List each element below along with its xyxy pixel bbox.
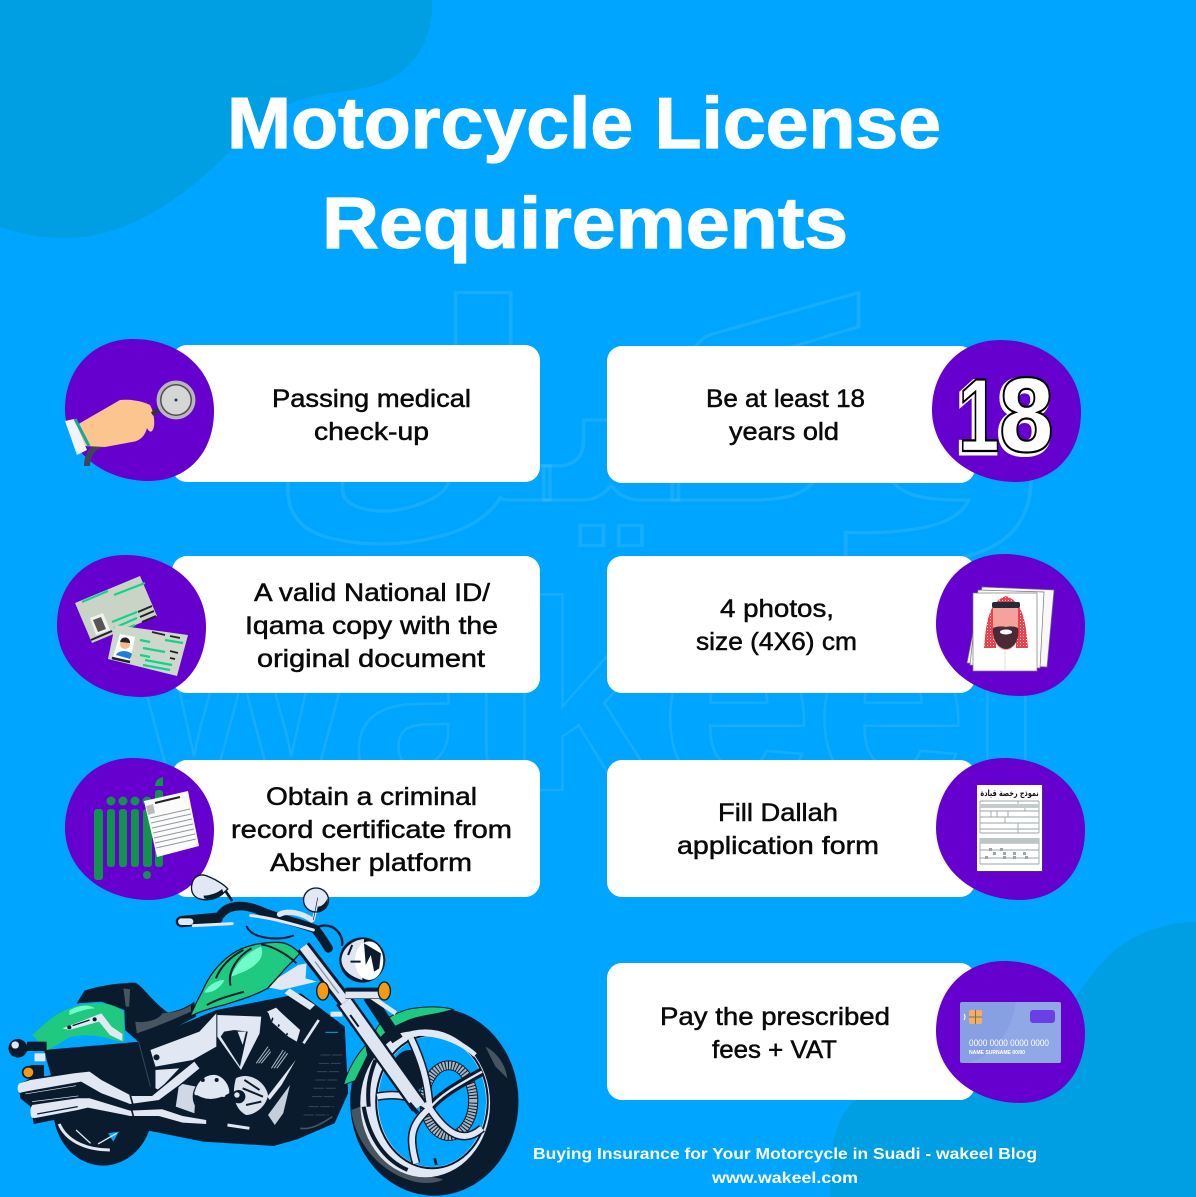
- engine silver parts rear: [139, 1013, 216, 1113]
- mirrors: [192, 875, 329, 920]
- icon: ID cards: [75, 576, 188, 676]
- handlebars: [182, 906, 342, 948]
- icon: form document: [977, 785, 1043, 872]
- rear wheel: [53, 1050, 153, 1166]
- text: Iqama copy with the: [245, 612, 498, 640]
- text: original document: [257, 645, 485, 673]
- text: [677, 799, 879, 860]
- purple blob: [936, 758, 1085, 900]
- icon: form document: نموذج رخصة قيادة: [980, 788, 1039, 798]
- icon: credit card: NAME SURNAME 00/00: [969, 1050, 1025, 1056]
- rear fender: [32, 1003, 124, 1050]
- panel: criminal record certificate: [65, 758, 540, 900]
- engine silver parts upper: [264, 963, 317, 1034]
- fuel tank: [190, 942, 300, 1017]
- text: A valid National ID/: [254, 579, 490, 607]
- footer text: www.wakeel.com: [711, 1170, 858, 1187]
- rear light and indicator: [8, 1039, 47, 1078]
- icon: hand with stethoscope: [65, 380, 196, 466]
- text: [272, 385, 471, 446]
- panel: fees: [607, 961, 1085, 1103]
- purple blob: [936, 554, 1085, 696]
- front fender: [343, 1007, 453, 1085]
- text: check-up: [314, 418, 429, 446]
- footer text: Buying Insurance for Your Motorcycle in Suadi - wakeel Blog: [533, 1146, 1037, 1163]
- icon: number 18: [956, 358, 1056, 477]
- purple blob: [57, 555, 206, 697]
- text: [231, 783, 512, 877]
- watermark: وكيل: [266, 246, 1054, 568]
- panel: age 18: [607, 340, 1081, 483]
- card: [607, 760, 975, 897]
- text: [706, 385, 865, 446]
- text: Passing medical: [272, 385, 471, 413]
- card: [172, 345, 540, 482]
- headlight: [339, 937, 385, 983]
- card: [607, 346, 975, 483]
- background shape: top left: [0, 0, 432, 238]
- icon: number 18: 1: [958, 358, 1000, 474]
- text: Be at least 18: [706, 385, 865, 413]
- title: Motorcycle License: [227, 84, 941, 164]
- purple blob: [932, 340, 1081, 482]
- purple blob: [65, 758, 214, 900]
- text: [245, 579, 498, 673]
- text: Obtain a criminal: [266, 783, 477, 811]
- front forks: [343, 997, 419, 1113]
- seat: [77, 983, 196, 1045]
- icon: credit card: [960, 1002, 1061, 1063]
- text: record certificate from: [231, 816, 512, 844]
- title: [227, 84, 941, 264]
- text: fees + VAT: [712, 1036, 837, 1064]
- icon: number 18: 1: [956, 360, 998, 476]
- panel: medical check-up: [65, 339, 540, 482]
- indicators: [317, 982, 390, 1000]
- text: application form: [677, 832, 879, 860]
- title: Requirements: [322, 184, 848, 264]
- card: [172, 556, 540, 693]
- card: [172, 760, 540, 897]
- text: Pay the prescribed: [660, 1003, 890, 1031]
- panel: national ID: [57, 555, 540, 697]
- card: [607, 963, 975, 1100]
- brake disc: [425, 1065, 473, 1136]
- purple blob: [65, 339, 214, 481]
- purple blob: [936, 961, 1085, 1103]
- exhaust pipes: [18, 1060, 210, 1128]
- watermark: [131, 246, 1054, 848]
- panel: photos: [607, 554, 1085, 696]
- text: years old: [729, 418, 839, 446]
- bike body and engine: [44, 963, 348, 1146]
- text: [696, 595, 857, 656]
- text: Absher platform: [270, 849, 472, 877]
- text: 4 photos,: [720, 595, 834, 623]
- card: [607, 556, 975, 693]
- footer text: [533, 1146, 1037, 1187]
- engine silver parts front: [193, 1010, 342, 1129]
- background shape: bottom right: [830, 922, 1196, 1197]
- icon: number 18: 8: [997, 358, 1056, 475]
- panel: application form: [607, 758, 1085, 900]
- icon: number 18: 8: [995, 360, 1054, 477]
- icon: credit card: 0000 0000 0000 0000: [969, 1038, 1049, 1048]
- icon: Absher logo and document: [94, 777, 199, 880]
- watermark: wakeel: [131, 547, 1045, 848]
- front wheel: [350, 1008, 518, 1196]
- text: size (4X6) cm: [696, 628, 857, 656]
- text: [660, 1003, 890, 1064]
- motorcycle illustration: [8, 875, 518, 1196]
- text: Fill Dallah: [718, 799, 838, 827]
- icon: photos of man: [967, 587, 1054, 671]
